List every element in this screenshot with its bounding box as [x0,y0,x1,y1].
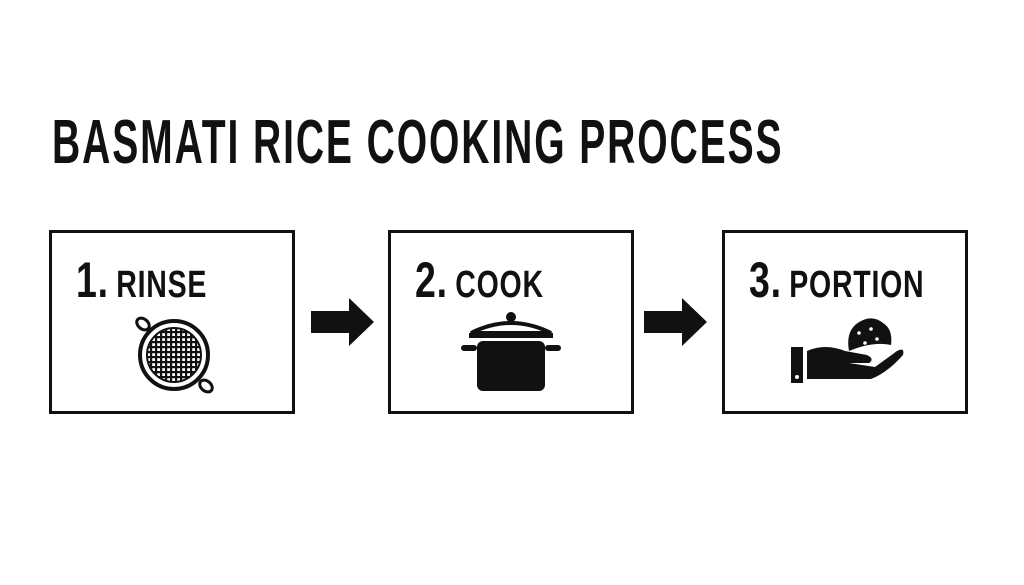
arrow 2 [644,298,707,346]
step label: portion: 3.PORTION [749,252,924,308]
icon: hand holding rice [791,318,904,383]
icon: pot [461,312,561,391]
panel: portion [722,230,968,414]
step label: cook: 2.COOK [415,252,544,308]
title: BASMATI RICE COOKING PROCESS [52,108,783,177]
panel: cook [388,230,634,414]
arrow 1 [311,298,374,346]
icon: strainer [135,316,214,394]
panel: rinse [49,230,295,414]
step label: rinse: 1.RINSE [76,252,207,308]
